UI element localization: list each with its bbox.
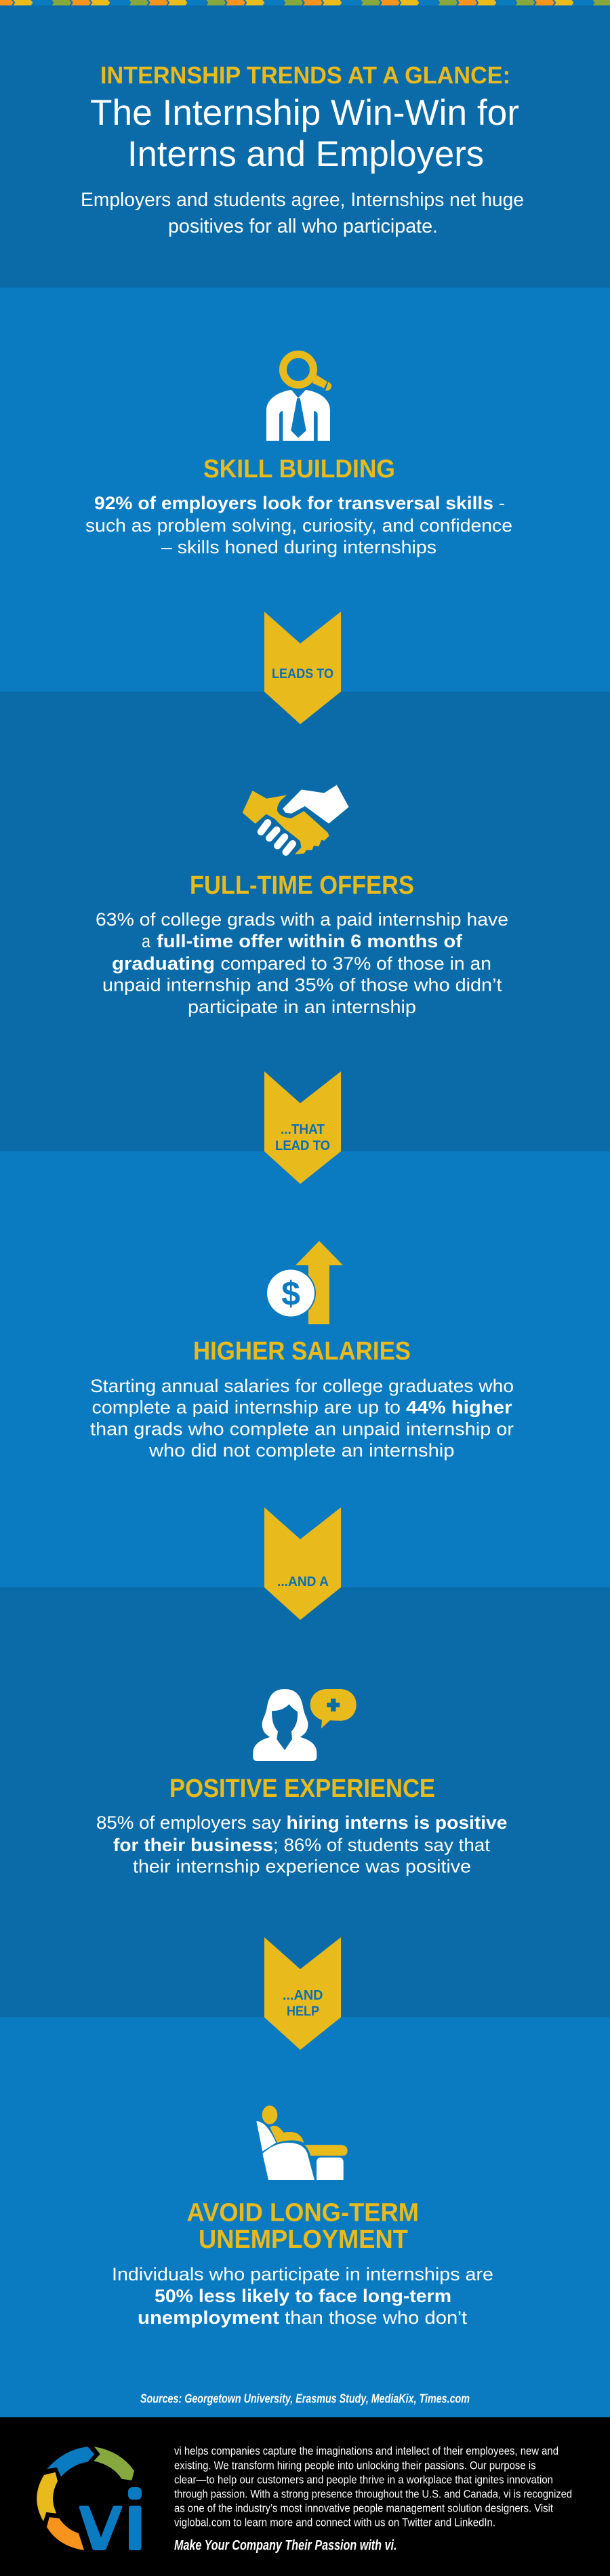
arrow: that lead to: LEAD TO	[275, 1138, 330, 1153]
body text: such as problem solving, curiosity, and confidence	[85, 515, 512, 536]
arrow: that lead to: ...THAT	[281, 1122, 325, 1137]
heading: AVOID LONG-TERM	[187, 2198, 419, 2227]
body text: ; 86% of students say that	[273, 1835, 491, 1855]
company description: existing. We transform hiring people into unlocking their passions. Our purpose is	[174, 2459, 535, 2472]
heading: SKILL BUILDING	[203, 455, 395, 483]
body text: 85% of employers say	[96, 1812, 281, 1833]
intro text: positives for all who participate.	[168, 216, 438, 237]
panel: footer	[37, 2444, 572, 2554]
body text: – skills honed during internships	[161, 537, 436, 557]
body text: unpaid internship and 35% of those who didn’t	[102, 975, 502, 995]
body text: 44% higher	[406, 1397, 512, 1417]
heading: HIGHER SALARIES	[193, 1337, 411, 1366]
icon: woman with speech bubble	[253, 1689, 357, 1761]
arrow: and help: HELP	[287, 2004, 319, 2019]
body text: hiring interns is positive	[286, 1812, 507, 1833]
company description	[174, 2444, 572, 2529]
body text: for their business	[113, 1835, 273, 1855]
company description: as one of the industry’s most innovative people management solution designers. Visit	[174, 2502, 553, 2514]
body text: full-time offer within 6 months of	[157, 931, 463, 951]
body text: participate in an internship	[188, 997, 416, 1017]
tagline: Make Your Company Their Passion with vi.	[174, 2537, 397, 2554]
body text: their internship experience was positive	[133, 1857, 471, 1877]
company description: viglobal.com to learn more and connect with us on Twitter and LinkedIn.	[174, 2516, 495, 2529]
panel: full-time offers	[96, 785, 508, 1017]
panel: header background	[0, 0, 610, 288]
arrow: leads to	[264, 612, 341, 724]
panel: footer background	[0, 2417, 610, 2576]
body text: 50% less likely to face long-term	[155, 2286, 451, 2306]
header text block	[81, 62, 524, 237]
intro text	[81, 189, 524, 237]
arrow: and a: ...AND A	[277, 1574, 329, 1589]
body text: unemployment	[138, 2307, 279, 2328]
sources line: Sources: Georgetown University, Erasmus Study, MediaKix, Times.com	[140, 2392, 470, 2406]
title: Interns and Employers	[127, 134, 484, 174]
icon: coin and up arrow	[266, 1241, 343, 1324]
panel: higher salaries background	[0, 1151, 610, 1587]
arrow: and a	[264, 1507, 341, 1620]
panel: skill building background	[0, 288, 610, 692]
body text	[96, 909, 508, 1017]
arrow: leads to: LEADS TO	[272, 667, 333, 681]
body text: complete a paid internship are up to	[92, 1397, 401, 1417]
icon: magnifier head and businessman	[266, 354, 331, 441]
arrow: and help	[264, 1937, 341, 2050]
icon: handshake	[243, 785, 348, 854]
body text: -	[499, 493, 505, 513]
company description: clear—to help our customers and people thrive in a workplace that ignites innovation	[174, 2474, 553, 2486]
heading: FULL-TIME OFFERS	[190, 871, 414, 900]
body text	[90, 1376, 514, 1461]
panel: positive experience	[96, 1689, 507, 1877]
panel: avoid unemployment background	[0, 2017, 610, 2417]
body text: compared to 37% of those in an	[221, 953, 491, 974]
body text: 92% of employers look for transversal skills	[94, 493, 493, 513]
icon: person reclining in armchair	[256, 2105, 348, 2180]
top chevron strip	[0, 0, 610, 5]
arrow: and help: ...AND	[283, 1988, 323, 2003]
body text	[112, 2264, 493, 2328]
heading	[187, 2198, 419, 2254]
panel: higher salaries	[90, 1241, 514, 1461]
arrow: that lead to	[264, 1071, 341, 1184]
body text: than those who don't	[285, 2307, 468, 2328]
body text: graduating	[112, 953, 215, 974]
body text	[85, 493, 512, 557]
panel: full-time offers background	[0, 692, 610, 1151]
panel: avoid long-term unemployment	[112, 2105, 493, 2406]
panel: skill building	[85, 354, 512, 557]
title: The Internship Win-Win for	[90, 93, 519, 133]
body text: who did not complete an internship	[148, 1440, 454, 1461]
body text: Starting annual salaries for college graduates who	[90, 1376, 514, 1396]
body text	[96, 1812, 507, 1877]
intro text: Employers and students agree, Internships net huge	[81, 189, 524, 211]
title	[90, 93, 519, 174]
body text: a	[142, 931, 151, 951]
company description: vi helps companies capture the imaginations and intellect of their employees, new and	[174, 2444, 558, 2457]
icon: coin and up arrow: $	[281, 1275, 300, 1313]
panel: positive experience background	[0, 1587, 610, 2017]
kicker heading: INTERNSHIP TRENDS AT A GLANCE:	[100, 62, 510, 89]
heading: UNEMPLOYMENT	[199, 2225, 408, 2254]
body text: than grads who complete an unpaid internship or	[90, 1419, 514, 1439]
logo: vi	[37, 2446, 142, 2550]
heading: POSITIVE EXPERIENCE	[169, 1775, 435, 1803]
body text: 63% of college grads with a paid internship have	[96, 909, 508, 930]
body text: Individuals who participate in internships are	[112, 2264, 493, 2284]
